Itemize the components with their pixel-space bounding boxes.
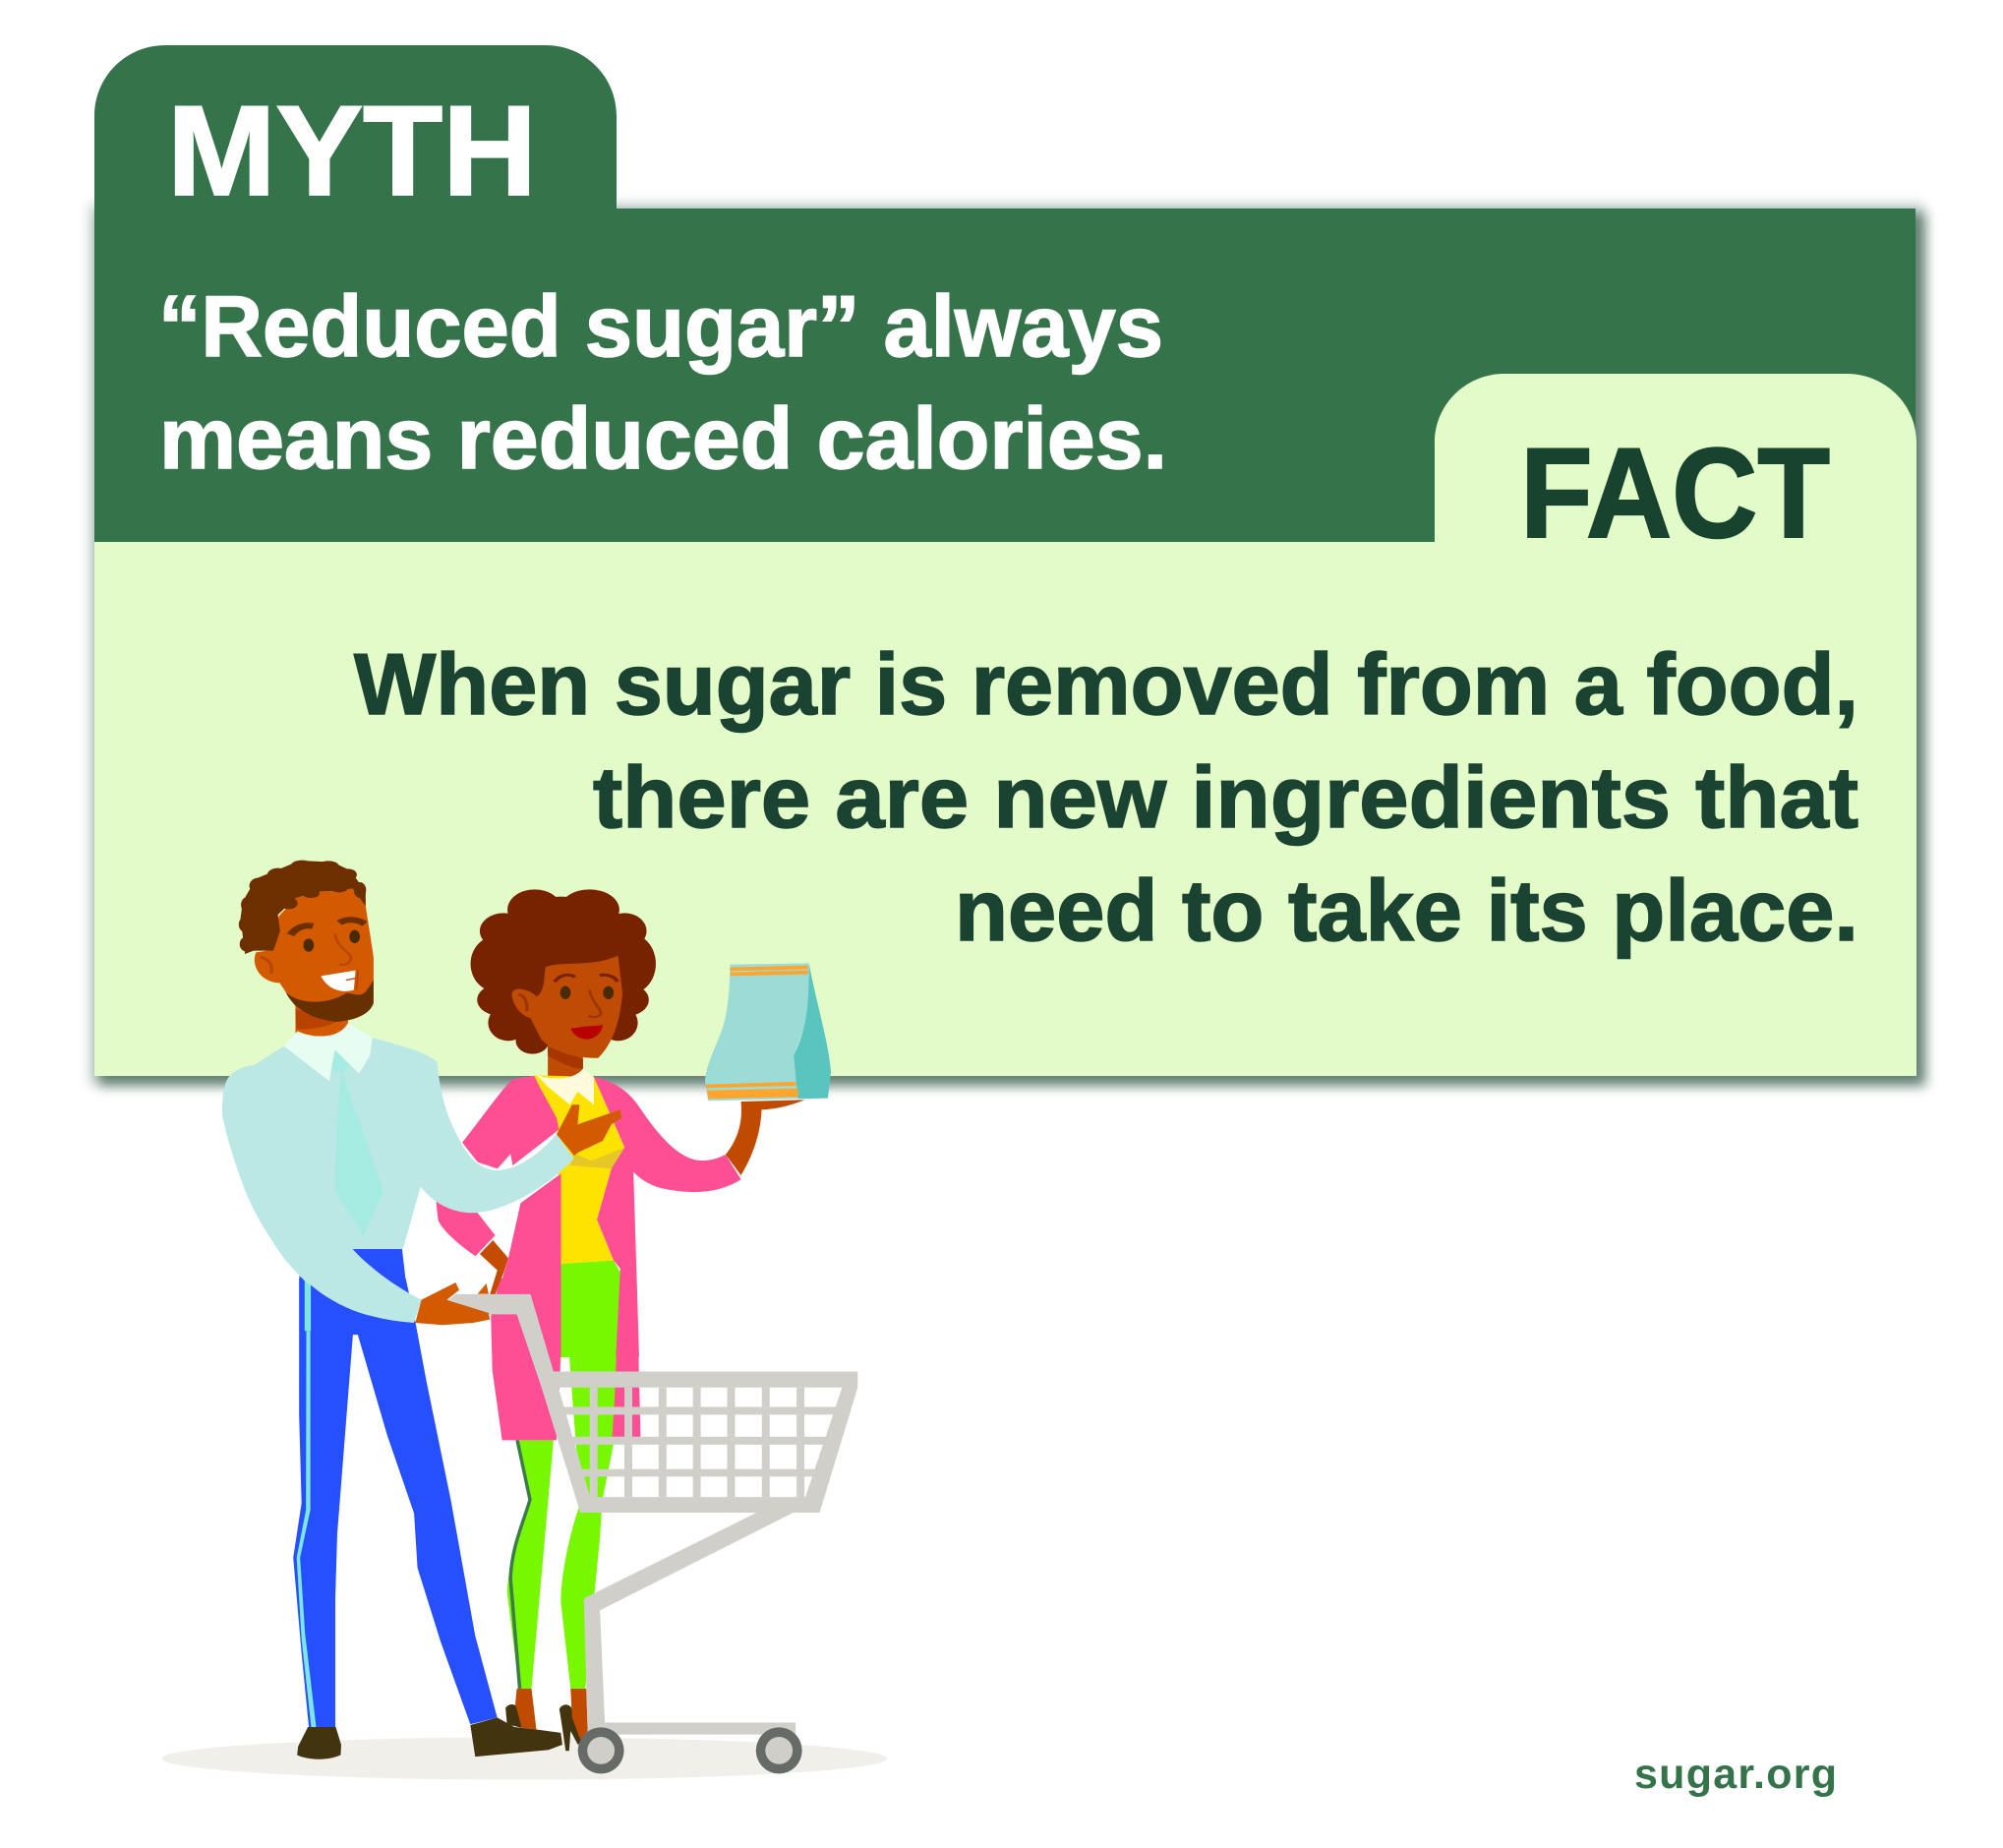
panel: fact — [94, 374, 1916, 1076]
fact heading: FACT — [1520, 421, 1830, 565]
shopping cart — [448, 1294, 857, 1773]
myth statement: “Reduced sugar” always — [158, 277, 1163, 375]
myth heading: MYTH — [167, 79, 537, 222]
man facial features — [291, 920, 365, 935]
myth statement: means reduced calories. — [159, 389, 1167, 487]
icon: sugar bag — [705, 963, 831, 1101]
woman face — [512, 956, 622, 1058]
man trousers waist — [299, 1249, 416, 1331]
man pointing hand — [557, 1104, 621, 1156]
myth statement — [158, 277, 1167, 487]
man hand on cart — [415, 1282, 490, 1325]
man neck — [295, 1003, 348, 1043]
fact statement: need to take its place. — [955, 862, 1858, 959]
cart wheels — [578, 1727, 624, 1773]
woman collar — [537, 1069, 594, 1104]
woman upper body and bag — [436, 889, 831, 1357]
fact statement: When sugar is removed from a food, — [354, 635, 1858, 733]
woman top — [534, 1075, 624, 1264]
man tie — [331, 1049, 383, 1236]
fact statement — [354, 635, 1858, 959]
illustration: couple shopping with cart — [162, 861, 887, 1780]
woman neck — [548, 1043, 583, 1079]
woman forearm — [480, 1240, 508, 1294]
website label: sugar.org — [1634, 1751, 1837, 1798]
man beard — [286, 981, 374, 1022]
cart frame — [448, 1294, 857, 1735]
man legs — [293, 1279, 562, 1759]
fact body — [94, 374, 1916, 1076]
woman pink cardigan — [462, 1076, 559, 1168]
cart grid — [562, 1388, 836, 1497]
man hair — [239, 861, 366, 954]
myth tab — [94, 45, 1915, 543]
panel shadow — [88, 203, 1925, 1086]
fact statement: there are new ingredients that — [593, 748, 1858, 846]
man head — [273, 888, 374, 1020]
woman hair — [471, 889, 656, 1054]
man upper body — [222, 861, 621, 1331]
ground shadow — [162, 1737, 887, 1780]
man shirt — [222, 1038, 574, 1323]
woman facial features — [555, 975, 618, 982]
man collar — [283, 1023, 373, 1081]
woman lower body — [491, 1279, 640, 1751]
woman raised arm — [726, 1100, 804, 1175]
panel: myth — [94, 45, 1915, 543]
